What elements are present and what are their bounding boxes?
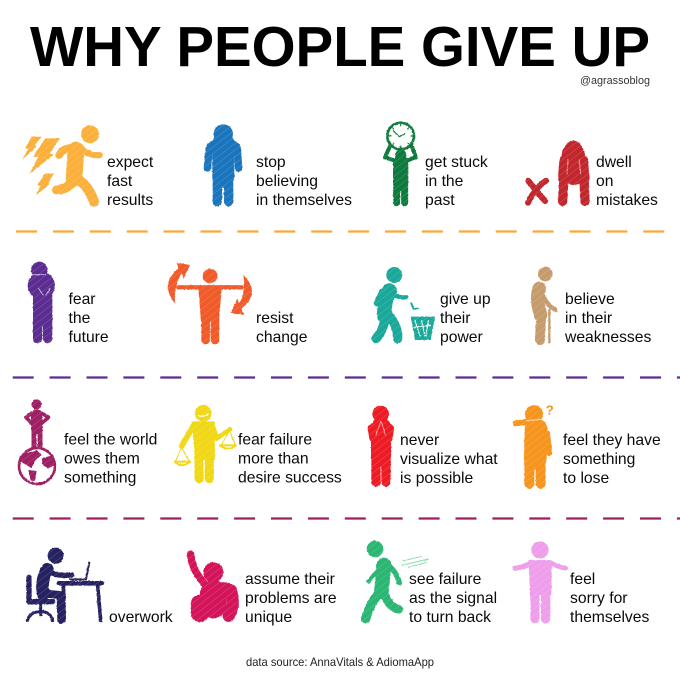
dashed divider 2 — [13, 376, 680, 379]
label: desire success — [238, 470, 342, 486]
item: feel sorry for themselves — [515, 541, 649, 626]
label: mistakes — [596, 192, 658, 209]
item: feel they have something to lose — [516, 403, 661, 487]
label: something — [64, 470, 136, 486]
label: feel — [570, 571, 595, 588]
label: in their — [565, 310, 612, 327]
icon: elderly figure with cane — [538, 267, 557, 343]
item: never visualize what is possible — [372, 406, 498, 487]
icon: figure standing on globe — [19, 399, 55, 484]
credit handle: @agrassoblog — [580, 75, 650, 87]
item: get stuck in the past — [385, 123, 488, 209]
label: dwell — [596, 154, 632, 171]
label: assume their — [245, 571, 335, 588]
item: fear the future — [28, 262, 109, 346]
label: unique — [245, 609, 292, 626]
label: to turn back — [409, 609, 491, 626]
label: fast — [107, 173, 133, 190]
dashed divider 1 — [0, 230, 680, 233]
item: expect fast results — [23, 125, 154, 209]
icon: figure scratching head with question mark — [516, 403, 554, 484]
label: in the — [425, 173, 464, 190]
label: get stuck — [425, 154, 488, 171]
label: more than — [238, 450, 309, 468]
item: overwork — [27, 548, 173, 626]
label: feel the world — [64, 432, 157, 448]
dashed divider 3 — [13, 517, 680, 520]
label: to lose — [563, 470, 609, 487]
title: WHY PEOPLE GIVE UP — [30, 15, 650, 78]
item: see failure as the signal to turn back — [366, 541, 497, 626]
label: the — [68, 310, 91, 327]
label: fear — [68, 291, 96, 308]
label: problems are — [245, 590, 337, 607]
icon: figure covering face — [372, 406, 390, 482]
label: change — [256, 329, 308, 346]
label: owes them — [64, 450, 140, 468]
label: expect — [107, 154, 154, 171]
icon: figure working at desk — [27, 548, 102, 621]
label: overwork — [109, 609, 173, 626]
icon: purple figure with arms behind — [28, 262, 55, 339]
icon: T-pose figure with rotating arrows — [168, 263, 252, 340]
icon: figure holding scales — [174, 405, 236, 479]
label: never — [400, 432, 439, 449]
label: stop — [256, 154, 286, 171]
label: believing — [256, 173, 318, 190]
item: resist change — [168, 263, 308, 346]
icon: shrugging pink figure — [515, 541, 566, 619]
label: sorry for — [570, 590, 628, 607]
label: in themselves — [256, 192, 352, 209]
label: results — [107, 192, 153, 209]
item: fear failure more than desire success — [174, 405, 342, 486]
icon: blue standing figure — [207, 124, 239, 202]
label: is possible — [400, 470, 474, 487]
icon: running figure with lightning — [23, 125, 100, 202]
label: believe — [565, 291, 615, 308]
label: past — [425, 192, 455, 209]
label: future — [68, 329, 109, 346]
icon: figure holding clock — [385, 123, 416, 203]
icon: walking figure with motion lines — [366, 541, 428, 619]
item: believe in their weaknesses — [538, 267, 651, 346]
label: see failure — [409, 571, 482, 588]
icon: figure dropping paper into trash — [376, 267, 435, 340]
icon: seated figure raising arm — [191, 554, 233, 616]
label: as the signal — [409, 590, 497, 607]
label: feel they have — [563, 432, 661, 449]
data source footer: data source: AnnaVitals & AdiomaApp — [246, 655, 434, 669]
item: dwell on mistakes — [528, 141, 658, 209]
label: give up — [440, 291, 491, 308]
label: weaknesses — [564, 329, 651, 346]
icon: red X and hunched figure — [528, 141, 585, 203]
label: themselves — [570, 609, 649, 626]
item: assume their problems are unique — [191, 554, 337, 626]
item: give up their power — [376, 267, 491, 346]
item: feel the world owes them something — [19, 399, 157, 486]
label: resist — [256, 310, 294, 327]
label: something — [563, 451, 635, 468]
label: fear failure — [238, 432, 312, 448]
item: stop believing in themselves — [207, 124, 352, 209]
label: visualize what — [400, 451, 498, 468]
label: their — [440, 310, 471, 327]
label: on — [596, 173, 613, 190]
icon: question mark: ? — [546, 403, 554, 418]
label: power — [440, 329, 483, 346]
